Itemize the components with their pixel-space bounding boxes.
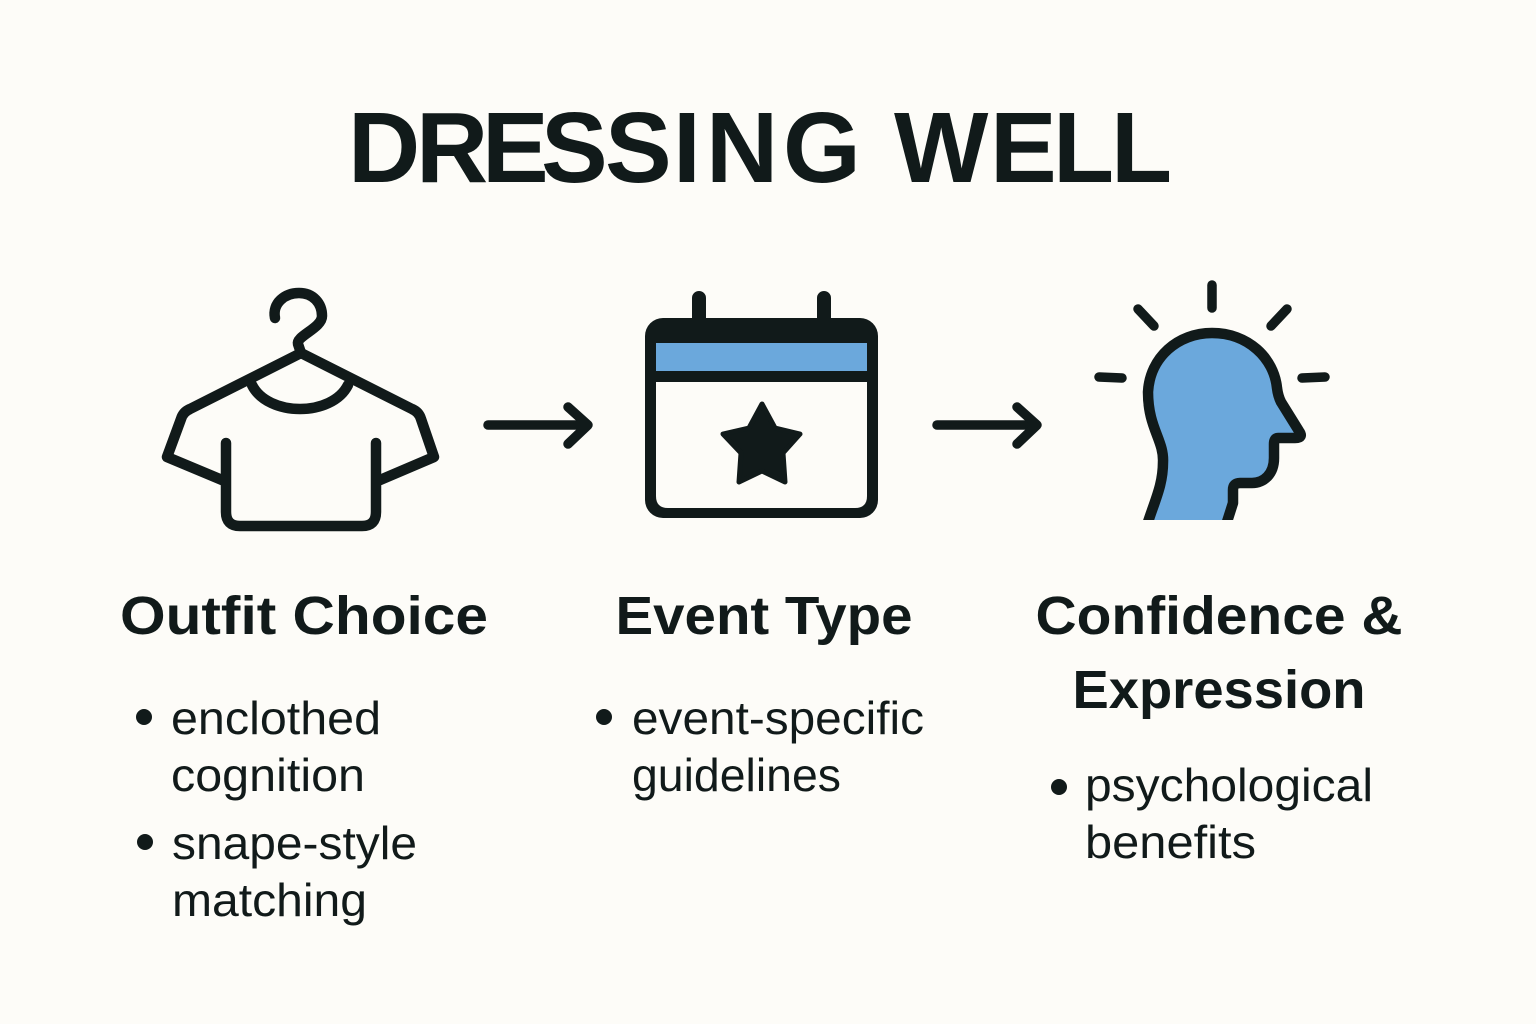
list: confidence and expression: [1051, 759, 1373, 868]
icon: head with rays: [1099, 285, 1325, 525]
list: outfit choice: [136, 692, 417, 926]
heading: confidence and expression: [1036, 586, 1402, 720]
heading: confidence and expression: Expression: [1072, 660, 1366, 720]
arrow: event to confidence: [937, 407, 1037, 444]
list: confidence and expression: benefits: [1085, 816, 1256, 868]
icon: calendar with star: [645, 298, 878, 518]
list: outfit choice: matching: [172, 874, 367, 926]
list: event type: guidelines: [632, 749, 841, 801]
title: DRESSING WELL: [348, 92, 1172, 204]
heading: event type: Event Type: [616, 586, 912, 646]
list: confidence and expression: psychological: [1085, 759, 1373, 811]
arrow: outfit to event: [488, 407, 588, 444]
list: outfit choice: cognition: [171, 749, 365, 801]
list: event type: [596, 692, 924, 801]
list: outfit choice: enclothed: [171, 692, 381, 744]
heading: confidence and expression: Confidence &: [1036, 586, 1402, 646]
icon: shirt on hanger: [167, 293, 434, 526]
heading: outfit choice: Outfit Choice: [120, 586, 488, 646]
list: event type: event-specific: [632, 692, 924, 744]
list: outfit choice: snape-style: [172, 817, 417, 869]
